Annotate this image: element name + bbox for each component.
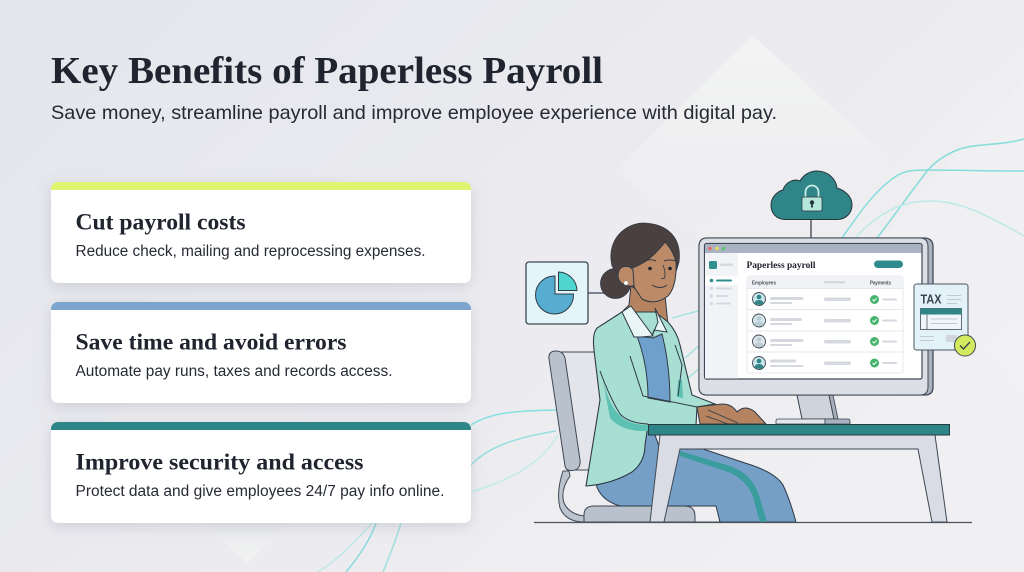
hair [611, 223, 679, 292]
monitor [699, 238, 933, 424]
floor line [534, 522, 972, 524]
icon: tax document [914, 284, 976, 356]
face [632, 242, 676, 302]
sleeve shadow [602, 375, 648, 431]
eyes and smile [643, 260, 676, 288]
hair bun [600, 268, 630, 298]
row 4 [752, 356, 897, 370]
employee table: Employees [752, 280, 776, 286]
row 3 [752, 335, 897, 348]
shirt [637, 334, 670, 402]
row 2 [752, 314, 897, 327]
earring [624, 281, 628, 285]
panel: cut payroll costs [51, 182, 471, 283]
screen button [874, 260, 903, 268]
sidebar [705, 253, 738, 378]
panel: improve security and access: Protect data and give employees 24/7 pay info online. [76, 483, 444, 500]
monitor body [699, 238, 933, 395]
ear [618, 266, 634, 286]
screen heading: Paperless payroll [746, 261, 816, 271]
title: Key Benefits of Paperless Payroll [51, 50, 603, 92]
jacket accent [677, 380, 683, 398]
panel: improve security and access [51, 422, 471, 523]
panel: cut payroll costs: Reduce check, mailing and reprocessing expenses. [76, 243, 426, 260]
panel: cut payroll costs: Cut payroll costs [76, 210, 246, 236]
row 1 [752, 292, 897, 306]
chair [549, 351, 720, 522]
employee table [747, 276, 903, 373]
panel: improve security and access: Improve security and access [76, 450, 364, 476]
icon: tax document: TAX [920, 292, 942, 306]
window title bar [705, 244, 922, 253]
subtitle: Save money, streamline payroll and improve employee experience with digital pay. [51, 102, 777, 124]
trouser stripe [680, 451, 767, 522]
panel: save time and avoid errors: Save time and avoid errors [76, 330, 346, 356]
jacket folds [600, 345, 697, 424]
woman [586, 223, 796, 522]
monitor stand [776, 395, 850, 424]
jacket [586, 312, 715, 486]
panel: save time and avoid errors: Automate pay runs, taxes and records access. [76, 363, 392, 380]
icon: pie chart [526, 262, 606, 324]
desk [648, 424, 950, 522]
employee table: Payments [870, 280, 891, 286]
icon: cloud with padlock [771, 171, 852, 238]
legs [596, 410, 796, 522]
panel: save time and avoid errors [51, 302, 471, 403]
monitor screen [704, 244, 922, 379]
neck [622, 285, 668, 337]
collar [622, 306, 667, 337]
hand [697, 404, 766, 424]
